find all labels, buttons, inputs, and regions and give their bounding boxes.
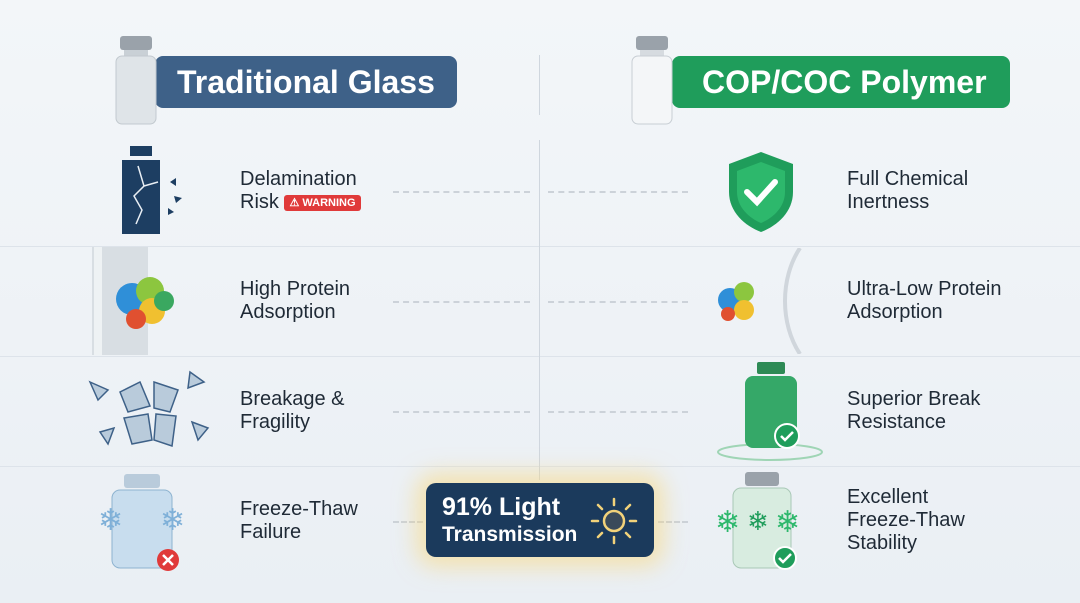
header bar left: [155, 56, 457, 108]
row 1 right icon: shield: [729, 152, 793, 232]
icon: polymer vial: [632, 36, 672, 124]
row 2 right icon: protein near polymer: [718, 248, 802, 354]
row 1 left icon: cracked vial: [122, 146, 182, 234]
row 3 right text: Resistance: [847, 411, 946, 433]
header bar right: COP/COC Polymer: [702, 64, 987, 100]
header bar right: [672, 56, 1010, 108]
header bar left: Traditional Glass: [177, 64, 435, 100]
row 4 right text: Excellent: [847, 486, 928, 508]
row 4 left text: [240, 498, 358, 543]
row 3 left text: [240, 388, 345, 433]
row 3 right text: Superior Break: [847, 388, 980, 410]
row 4 right icon: green frozen vial: [715, 472, 800, 570]
row 2 left text: Adsorption: [240, 301, 336, 323]
row 4 left icon: frozen vial with x: ❄: [160, 504, 185, 537]
row 3 left icon: shattered glass: [88, 370, 210, 447]
row 1 left text: [240, 168, 361, 213]
row 4 left text: Freeze-Thaw: [240, 498, 358, 520]
row 1 right text: [847, 168, 968, 213]
row 4 left icon: frozen vial with x: [98, 474, 185, 571]
row 1 left text: Delamination: [240, 168, 357, 190]
row 2 right text: Adsorption: [847, 301, 943, 323]
row 3 left text: Fragility: [240, 411, 310, 433]
row 2 left icon: protein on glass: [92, 247, 174, 355]
row 3 left text: Breakage &: [240, 388, 345, 410]
row 1 left text: Risk: [240, 191, 279, 213]
callout: 91% light transmission: [426, 483, 654, 557]
row 2 left text: [240, 278, 350, 323]
row 3 right text: [847, 388, 980, 433]
row 3 right icon: green vial with check: [717, 362, 823, 461]
row 4 right text: Stability: [847, 532, 917, 554]
icon: sun: [590, 498, 638, 544]
callout: 91% light transmission: 91% Light: [442, 493, 560, 521]
row 4 right text: Freeze-Thaw: [847, 509, 965, 531]
row 2 right text: Ultra-Low Protein: [847, 278, 1002, 300]
row 4 right text: [847, 486, 965, 554]
row 4 right icon: green frozen vial: ❄: [715, 506, 740, 539]
header: COP/COC polymer: [632, 36, 1010, 124]
row 2 right text: [847, 278, 1002, 323]
row 1 left text: ⚠ WARNING: [289, 197, 356, 209]
row 1 right text: Full Chemical: [847, 168, 968, 190]
row 1 right text: Inertness: [847, 191, 929, 213]
row 4 right icon: green frozen vial: ❄: [775, 506, 800, 539]
callout: 91% light transmission: Transmission: [442, 523, 577, 546]
row 4 left text: Failure: [240, 521, 301, 543]
icon: glass vial: [116, 36, 156, 124]
row 2 left text: High Protein: [240, 278, 350, 300]
row 4 left icon: frozen vial with x: ❄: [98, 504, 123, 537]
header: traditional glass: [116, 36, 457, 124]
row 4 right icon: green frozen vial: ❄: [747, 506, 769, 536]
